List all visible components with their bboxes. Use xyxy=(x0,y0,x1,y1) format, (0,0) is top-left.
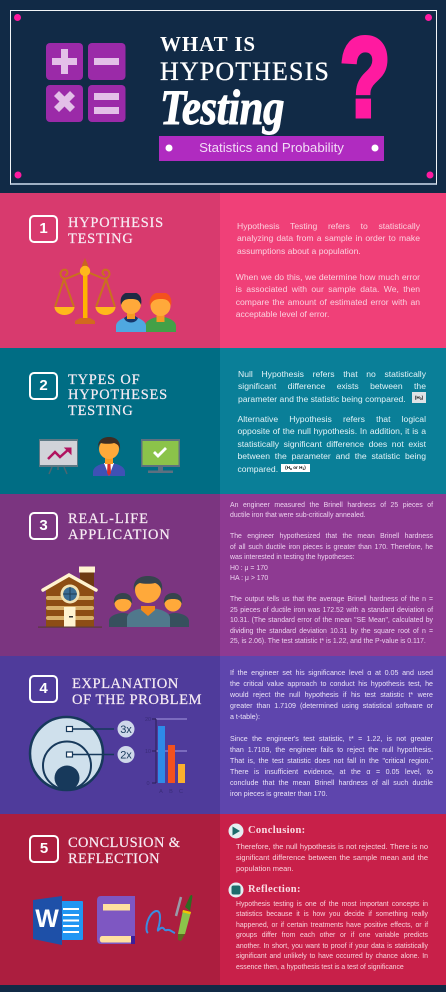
body text: than 1.7109, the engineer fails to reject the null hypothesis. xyxy=(230,746,433,754)
badge: alternative hypothesis symbol: (Ha or H1) xyxy=(285,465,306,471)
body text: analyzing data from a sample in order to make xyxy=(237,233,420,243)
panel: types of hypotheses testing xyxy=(0,348,446,494)
body text: would reject the null hypothesis if his test statistic t* were xyxy=(230,690,433,698)
body text: Null Hypothesis refers that no statistically xyxy=(238,369,426,379)
badge: null hypothesis symbol xyxy=(412,392,426,403)
body text: a t-table): xyxy=(230,712,260,720)
text: reflection: Hypothesis testing is one of the most important concepts in xyxy=(236,900,428,908)
heading: TESTING xyxy=(68,403,134,419)
body text: That is, the test statistic does not fall in the "critical region." xyxy=(230,756,433,764)
heading: APPLICATION xyxy=(68,526,171,542)
number 4 xyxy=(29,675,58,703)
body text: parameter and the statistic being compared. xyxy=(238,394,406,404)
heading: HYPOTHESES xyxy=(68,387,168,403)
diagram: nested circles with callouts: 3x xyxy=(120,724,132,736)
icon: word document xyxy=(33,896,83,945)
icon: monitor with check xyxy=(141,439,180,473)
body text: compared. xyxy=(238,464,278,474)
body text: 25 pieces of ductile iron was 172.52 with a standard deviation of xyxy=(230,607,433,614)
icon: businessman xyxy=(93,437,125,476)
text: reflection xyxy=(236,900,428,971)
panel: hypothesis testing xyxy=(0,193,446,348)
heading: reflection: Reflection: xyxy=(248,884,301,895)
body text: The output tells us that the average Brinell hardness of the n = xyxy=(230,596,433,603)
heading: REFLECTION xyxy=(68,850,160,866)
body text xyxy=(236,221,420,319)
body text: between the parameter and the statistic being xyxy=(238,451,426,461)
heading xyxy=(68,834,180,866)
number 2 xyxy=(29,372,58,400)
icon: word document: W xyxy=(35,905,59,933)
corner dots xyxy=(14,14,434,178)
title: hypothesis: HYPOTHESIS xyxy=(160,57,330,86)
body text: ductile iron that were sub-critically annealed. xyxy=(230,512,366,519)
body text: assumptions about a population. xyxy=(237,246,361,256)
banner dots xyxy=(166,144,378,152)
title: testing: Testing xyxy=(160,81,284,135)
text: reflection: groups differ from each other or if one variable predicts xyxy=(236,932,428,939)
text: conclusion: significant difference between the sample mean and the xyxy=(236,852,428,862)
bar chart xyxy=(145,717,187,794)
text: conclusion: Therefore, the null hypothesis is not rejected. There is no xyxy=(236,842,428,850)
body text: was interested in testing the hypotheses: xyxy=(230,554,354,561)
text: reflection: significant and unlikely to have occurred by chance alone. In xyxy=(236,953,428,960)
text: reflection: essence then, a hypothesis test is a test of significance xyxy=(236,964,404,971)
body text: There is insufficient evidence, at the α = 0.05 level, to xyxy=(230,768,433,776)
number 1 xyxy=(29,215,58,243)
heading: EXPLANATION xyxy=(72,676,179,692)
body text: Hypothesis Testing refers to statistically xyxy=(237,221,420,231)
heading: TESTING xyxy=(68,230,134,246)
icon: scales of justice xyxy=(54,258,116,324)
diagram: nested circles with callouts xyxy=(28,716,134,792)
heading: REAL-LIFE xyxy=(68,510,149,526)
panel: conclusion and reflection xyxy=(0,814,446,985)
body text: iron pieces is greater than 170. xyxy=(230,790,327,798)
heading: conclusion: Conclusion: xyxy=(248,825,306,836)
subtitle banner xyxy=(159,136,384,161)
text: reflection: statistics because it is how you decide if something really xyxy=(236,911,428,918)
body text: greater than 1.7109 (determined using statistical software or xyxy=(230,702,433,710)
icon: presentation board xyxy=(39,439,78,474)
body text: of all such ductile iron pieces is greater than 170. Therefore, he xyxy=(230,544,433,551)
body text: acceptable level of error. xyxy=(236,309,329,319)
body text: 25, is 2.06). The test statistic t* is 1.22, and the P-value is 0.117. xyxy=(230,638,426,645)
body text: When we do this, we determine how much error xyxy=(236,272,420,282)
body text: opposite of the null hypothesis. In addition, it is a xyxy=(238,426,426,436)
text: reflection: happened, or if certain treatments have positive effects, or if xyxy=(236,922,428,929)
panel: real-life application xyxy=(0,494,446,656)
body text: compare the amount of estimated error with an xyxy=(236,297,420,307)
text: conclusion: population mean. xyxy=(236,864,294,872)
title: what is: WHAT IS xyxy=(160,32,256,56)
heading xyxy=(72,676,202,708)
decorative white frame xyxy=(10,10,437,185)
bar chart: 20 xyxy=(145,717,151,723)
badge: null hypothesis symbol: (H0) xyxy=(415,395,423,401)
number 2: 2 xyxy=(39,377,48,394)
heading: OF THE PROBLEM xyxy=(72,692,202,708)
body text: An engineer measured the Brinell hardness of 25 pieces of xyxy=(230,502,433,509)
icon: two people xyxy=(116,293,176,332)
body text: H0 : μ = 170 xyxy=(230,565,268,572)
header banner xyxy=(0,0,446,193)
icon: log cabin xyxy=(38,566,102,628)
icon: calculator math symbols xyxy=(46,43,126,122)
text: reflection: another. In short, you want to proof if your data is statistically xyxy=(236,943,428,950)
icon: conclusion play bullet xyxy=(228,824,244,838)
icon: purple book xyxy=(97,896,135,944)
panel: explanation of the problem xyxy=(0,656,446,814)
diagram: nested circles with callouts: 2x xyxy=(120,750,132,762)
number 3 xyxy=(29,512,58,540)
subtitle text: Statistics and Probability xyxy=(199,140,344,155)
heading xyxy=(68,510,171,542)
heading: CONCLUSION & xyxy=(68,834,180,850)
number 1: 1 xyxy=(39,220,48,237)
body text: conclude that the mean Brinell hardness of all such ductile xyxy=(230,778,433,786)
question mark: ? xyxy=(339,15,390,140)
body text: dividing the standard deviation 10.31 by the square root of n = xyxy=(230,628,433,635)
body text: HA : μ > 170 xyxy=(230,575,268,582)
number 5: 5 xyxy=(40,840,48,857)
number 5 xyxy=(29,835,59,863)
body text: The engineer hypothesized that the mean Brinell hardness xyxy=(230,533,433,540)
icon: pen and signature xyxy=(145,895,192,941)
body text xyxy=(230,502,434,645)
body text: If the engineer set his significance level α at 0.05 and used xyxy=(230,668,433,676)
body text: is associated with our sample data. We, then xyxy=(236,284,420,294)
bar chart: 0 xyxy=(146,781,150,787)
icon: group of people xyxy=(109,576,189,627)
heading: HYPOTHESIS xyxy=(68,214,164,230)
icon: reflection stop bullet xyxy=(228,882,244,898)
body text: the critical value approach to conduct his hypothesis test, he xyxy=(230,680,433,688)
body text: significant difference exists between the xyxy=(238,381,426,391)
body text: statistically significant difference does not exist xyxy=(238,439,426,449)
heading: TYPES OF xyxy=(68,372,140,388)
body text: 10.31. (The standard error of the mean "SE Mean", calculated by xyxy=(230,617,433,624)
badge: alternative hypothesis symbol xyxy=(281,464,310,472)
number 4: 4 xyxy=(39,680,48,697)
body text: Alternative Hypothesis refers that logical xyxy=(238,414,426,424)
bar chart: 10 xyxy=(145,749,151,755)
body text xyxy=(238,369,426,474)
body text xyxy=(230,668,433,798)
body text: Since the engineer's test statistic, t* = 1.22, is not greater xyxy=(230,734,433,742)
heading xyxy=(68,372,168,419)
text: conclusion xyxy=(236,842,428,872)
heading xyxy=(68,214,164,246)
number 3: 3 xyxy=(39,517,48,534)
